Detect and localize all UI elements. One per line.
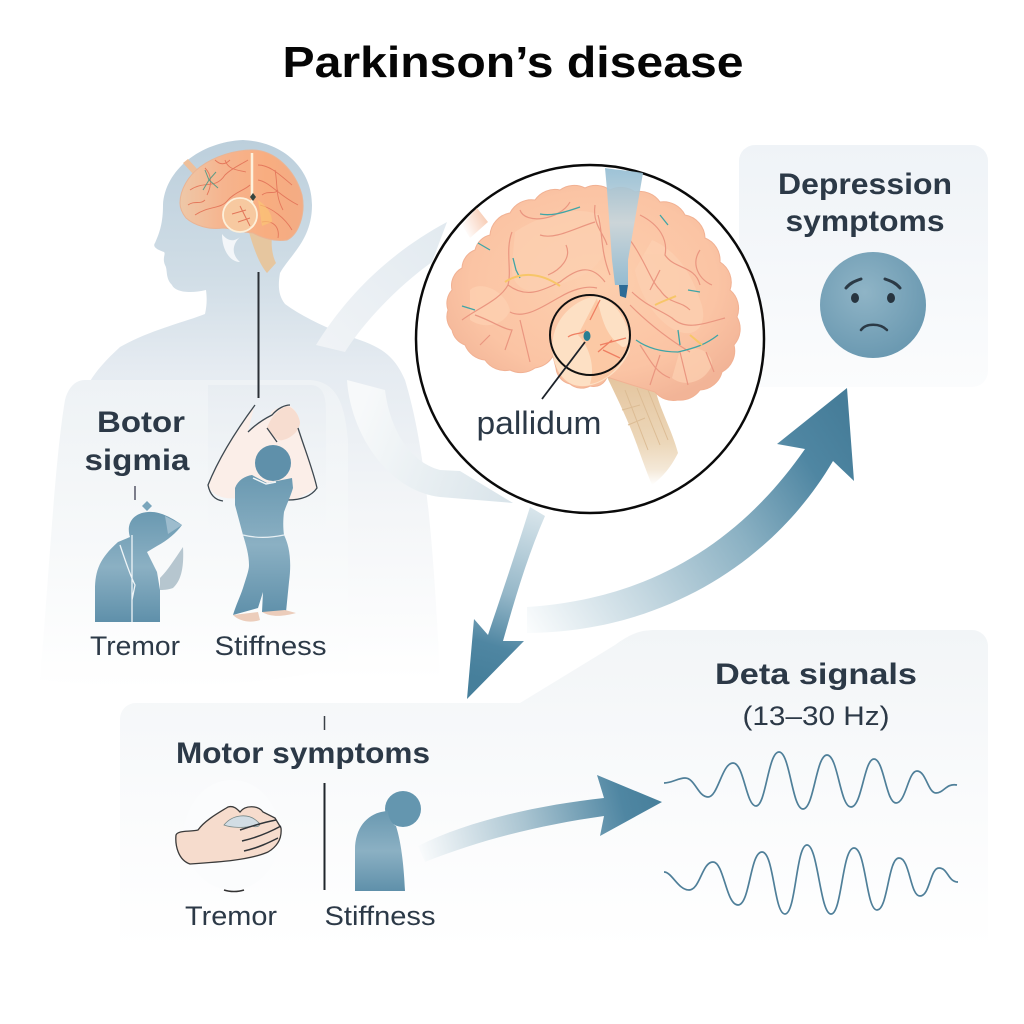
icon: tremor figure bbox=[95, 501, 183, 622]
title: Parkinson’s disease bbox=[282, 38, 744, 87]
pallidum leader bbox=[542, 342, 585, 399]
heading: motor signals: Botor bbox=[97, 406, 185, 439]
pallidum label: pallidum bbox=[476, 405, 602, 441]
label: tremor, lower: Tremor bbox=[185, 901, 277, 931]
magnifier circle bbox=[416, 165, 764, 513]
heading: depression symptoms: Depression bbox=[778, 168, 952, 201]
pallidum circle bbox=[550, 295, 630, 375]
label: tremor, upper: Tremor bbox=[90, 631, 180, 661]
arrow: to beta signals bbox=[418, 775, 662, 862]
leader line: brain to stiffness bbox=[258, 272, 260, 398]
pallidum nucleus bbox=[552, 296, 630, 386]
subheading: frequency band: (13–30 Hz) bbox=[742, 701, 890, 731]
panel: motor signals bbox=[40, 380, 348, 686]
label: stiffness, upper: Stiffness bbox=[214, 631, 326, 661]
panel: depression symptoms bbox=[739, 145, 988, 387]
icon: tremor hand bbox=[176, 780, 281, 892]
wave chart: lower bbox=[664, 845, 958, 914]
human silhouette bbox=[40, 140, 440, 680]
heading: beta signals: Deta signals bbox=[715, 658, 917, 691]
divider line bbox=[324, 783, 326, 890]
icon: stiffness stooped figure bbox=[355, 791, 421, 891]
heading: motor signals: sigmia bbox=[84, 444, 190, 477]
probe bbox=[605, 168, 643, 298]
panel: beta signals background bbox=[120, 630, 988, 950]
arrow: to depression bbox=[527, 388, 854, 633]
brain stem bbox=[607, 377, 678, 485]
divider tick bbox=[324, 716, 326, 730]
large brain bbox=[447, 185, 740, 400]
inner tinted area bbox=[208, 385, 326, 560]
small brain in head bbox=[180, 150, 303, 273]
swoosh: lower connector bbox=[347, 380, 513, 503]
peach tab bbox=[462, 208, 488, 238]
icon: stiffness figure bbox=[208, 405, 317, 622]
label: stiffness, lower: Stiffness bbox=[324, 901, 436, 931]
heading: depression symptoms: symptoms bbox=[786, 205, 944, 238]
wave chart: upper bbox=[664, 752, 957, 809]
arrow: down to motor symptoms bbox=[467, 507, 545, 699]
icon: sad face bbox=[820, 252, 926, 358]
swoosh: upper connector bbox=[316, 222, 447, 352]
heading: motor symptoms: Motor symptoms bbox=[176, 737, 430, 770]
pallidum marker bbox=[584, 331, 590, 341]
